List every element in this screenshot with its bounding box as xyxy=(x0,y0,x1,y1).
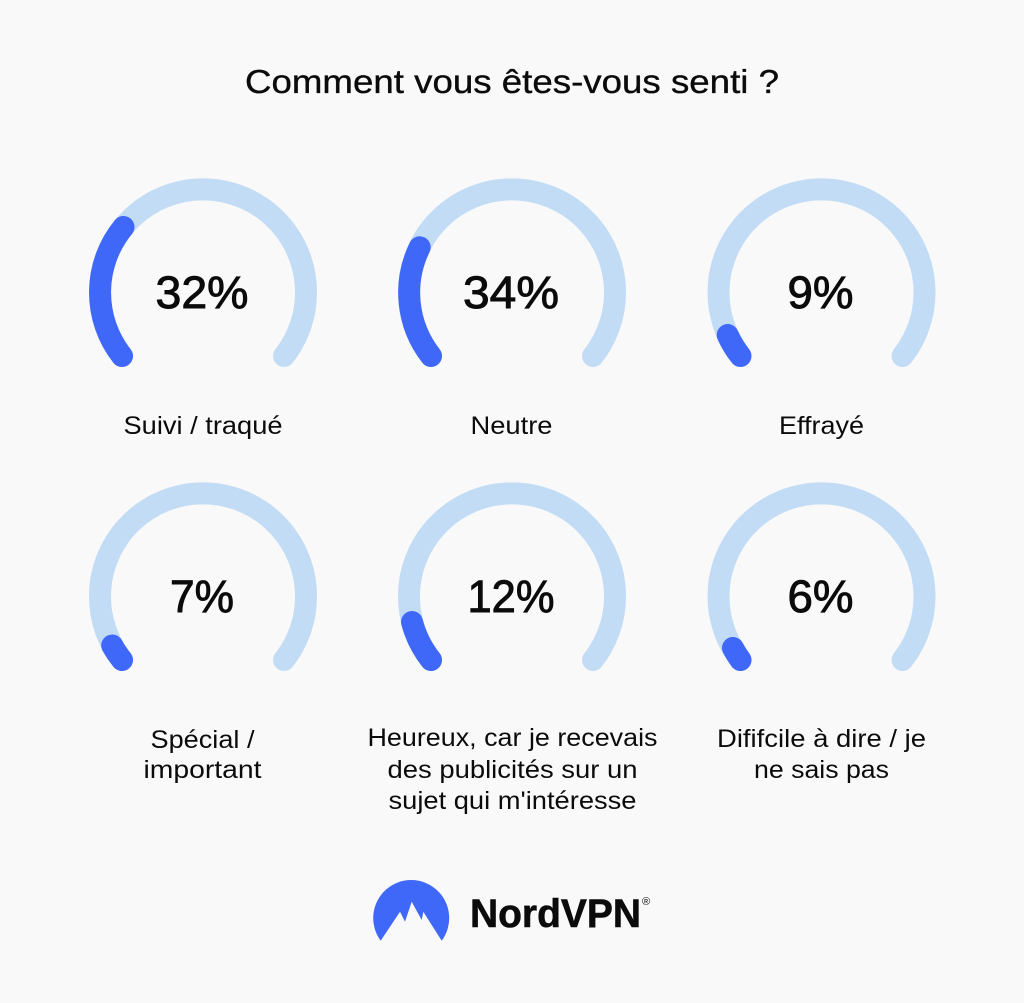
label: Effrayé xyxy=(779,412,864,440)
label: Heureux, car je recevais xyxy=(368,724,658,752)
gauge track xyxy=(719,493,925,660)
label: Dififcile à dire / je xyxy=(717,725,926,753)
gauge panel: Heureux 12%: des publicités sur un xyxy=(388,756,638,784)
label: Spécial / xyxy=(150,726,255,754)
gauge panel: Heureux 12% xyxy=(368,493,658,815)
registered mark: ® xyxy=(642,896,650,908)
gauge track xyxy=(409,189,615,356)
gauge value arc xyxy=(412,622,431,660)
gauge value arc xyxy=(409,247,431,356)
gauge panel: Suivi / traqué 32% xyxy=(100,189,306,440)
percentage: 32% xyxy=(156,267,248,318)
gauge value arc xyxy=(728,335,740,356)
gauge panel: Spécial / important 7% xyxy=(100,493,306,784)
icon: mountain in circle xyxy=(373,880,449,941)
gauge panel: Effrayé 9% xyxy=(718,189,924,440)
wordmark: NordVPN xyxy=(470,892,641,936)
percentage: 9% xyxy=(788,267,854,318)
gauge value arc xyxy=(112,646,122,660)
label: Suivi / traqué xyxy=(124,412,282,440)
label: Neutre xyxy=(470,412,552,440)
gauge value arc xyxy=(733,648,740,660)
title: Comment vous êtes-vous senti ? xyxy=(245,63,779,100)
gauge panel: Heureux 12%: sujet qui m'intéresse xyxy=(388,787,636,815)
percentage: 6% xyxy=(788,571,854,622)
gauge track xyxy=(409,493,615,660)
gauge panel: Difficile à dire 6% xyxy=(717,493,926,784)
percentage: 7% xyxy=(170,571,234,622)
percentage: 12% xyxy=(468,571,554,622)
gauge panel: Difficile à dire 6%: ne sais pas xyxy=(754,756,889,784)
gauge value arc xyxy=(100,227,124,356)
percentage: 34% xyxy=(463,267,559,318)
gauge panel: Spécial / important 7%: important xyxy=(144,756,262,784)
NordVPN logo xyxy=(373,880,650,941)
gauge track xyxy=(718,189,924,356)
gauge track xyxy=(100,189,306,356)
gauge panel: Neutre 34% xyxy=(409,189,615,440)
gauge track xyxy=(100,493,306,660)
